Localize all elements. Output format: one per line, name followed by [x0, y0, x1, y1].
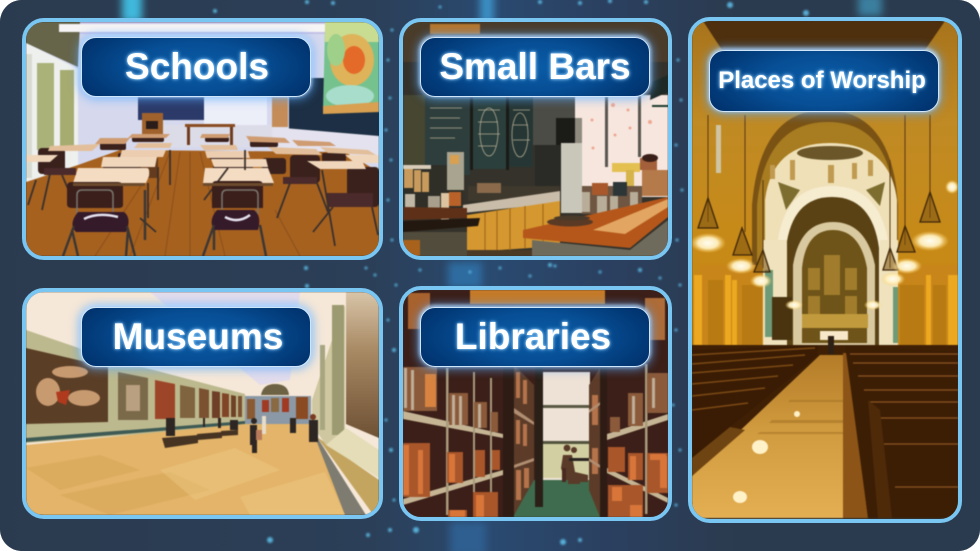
panel: places of worship: [688, 17, 962, 523]
label: Libraries: Libraries: [455, 316, 611, 357]
label: Schools: [81, 37, 311, 97]
panel: libraries: [399, 286, 672, 521]
panel: schools: [22, 18, 383, 260]
label: Schools: Schools: [125, 46, 269, 87]
label: Libraries: [420, 307, 650, 367]
label: Small Bars: [420, 37, 650, 97]
photo: library stacks: [403, 290, 668, 517]
label: Places of Worship: [709, 50, 939, 112]
photo: gallery hall: [26, 292, 379, 515]
panel: museums: [22, 288, 383, 519]
label: Places of Worship: Places of Worship: [718, 67, 926, 94]
photo: classroom: [26, 22, 379, 256]
panel: small bars: [399, 18, 672, 260]
label: Small Bars: Small Bars: [439, 46, 631, 87]
photo: coffee bar counter: [403, 22, 668, 256]
photo: church nave: [692, 21, 958, 519]
label: Museums: [81, 307, 311, 367]
label: Museums: Museums: [113, 316, 283, 357]
